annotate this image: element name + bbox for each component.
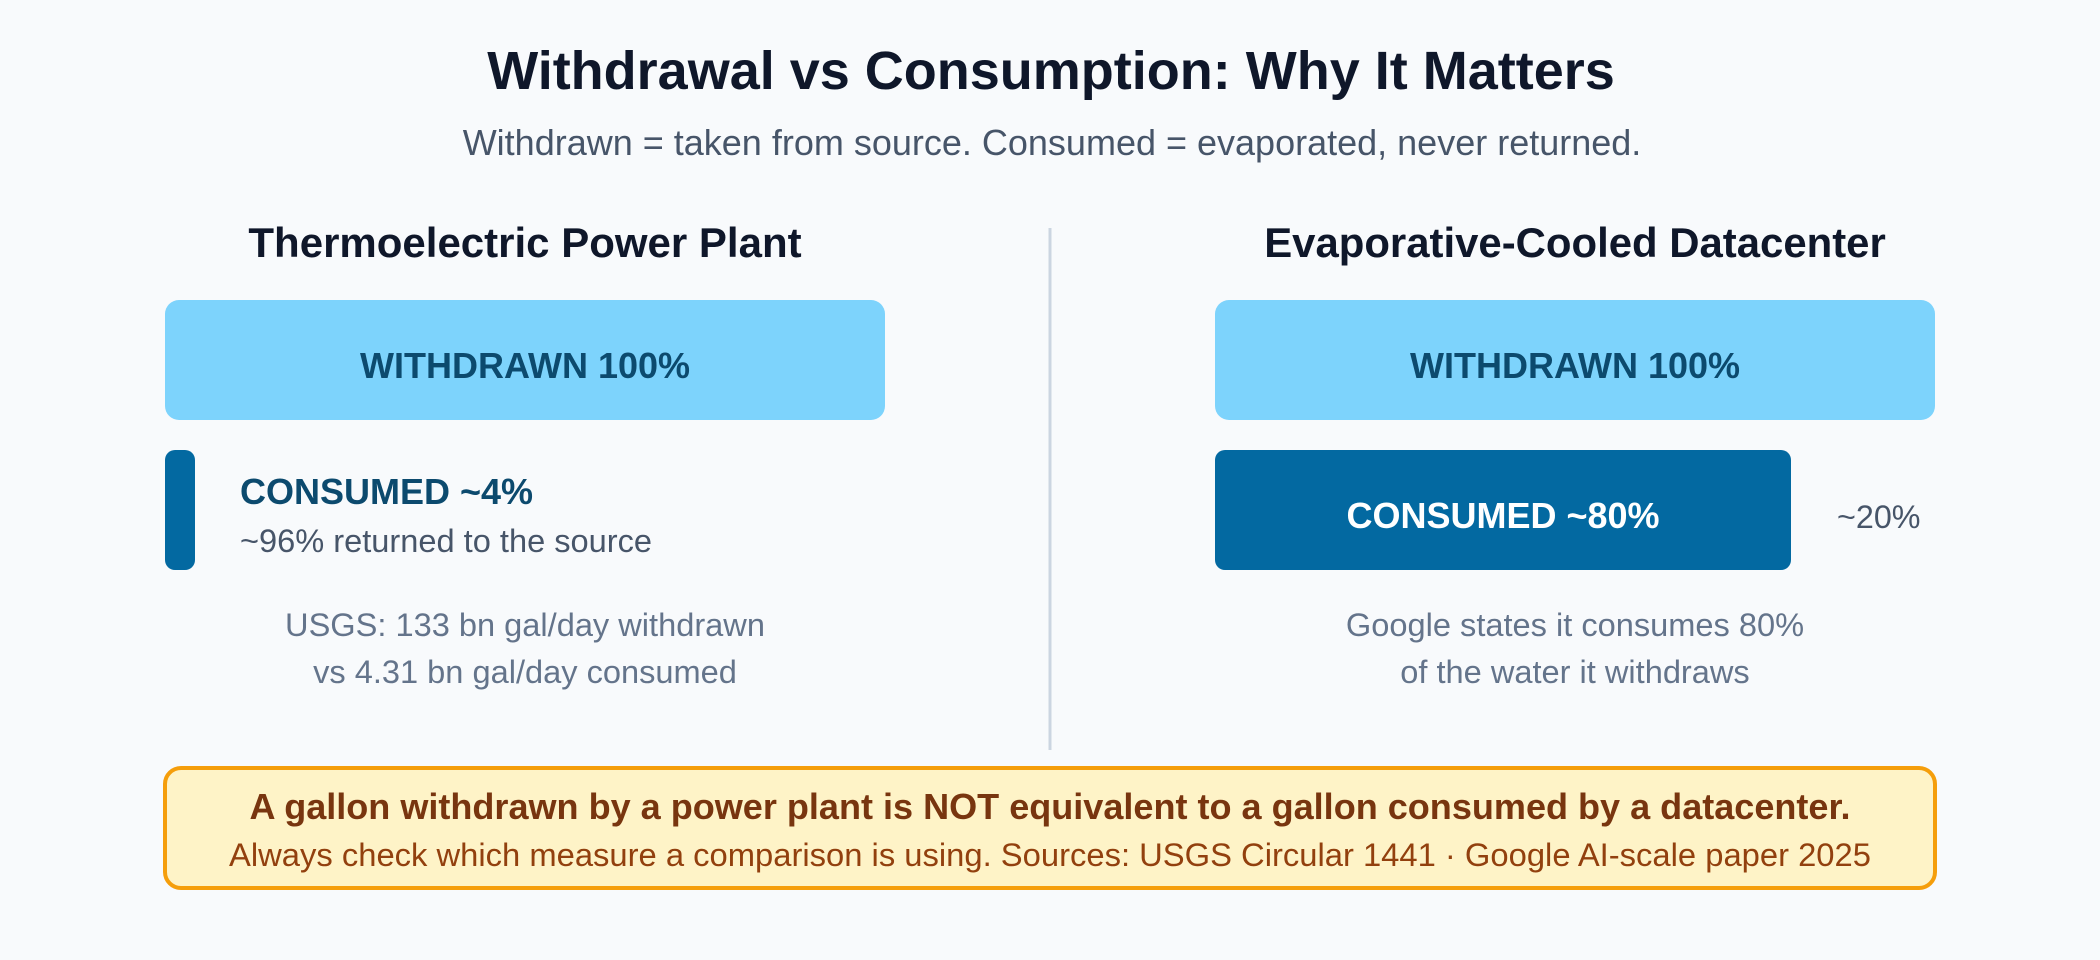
bar: consumed 80%: CONSUMED ~80% (1346, 495, 1660, 536)
note: USGS figures (285, 606, 765, 690)
subtitle: Withdrawn = taken from source. Consumed = evaporated, never returned. (463, 122, 1641, 163)
callout sources: Always check which measure a comparison is using. Sources: USGS Circular 1441 · Google AI-scale paper 2025 (229, 836, 1871, 873)
title: Withdrawal vs Consumption: Why It Matters (487, 41, 1615, 101)
note: USGS figures: vs 4.31 bn gal/day consumed (313, 653, 737, 690)
bar: withdrawn 100% (1215, 300, 1935, 420)
bar: consumed 80% (1215, 450, 1791, 570)
bar: consumed 4% (165, 450, 195, 570)
heading: evaporative-cooled datacenter: Evaporative-Cooled Datacenter (1264, 219, 1886, 266)
note: USGS figures: USGS: 133 bn gal/day withdrawn (285, 606, 765, 643)
label: remaining 20%: ~20% (1837, 499, 1921, 535)
bar: withdrawn 100%: WITHDRAWN 100% (360, 345, 690, 386)
divider (1048, 228, 1052, 750)
callout (165, 768, 1935, 888)
note: Google statement: of the water it withdraws (1400, 653, 1750, 690)
label: returned share: ~96% returned to the source (240, 522, 652, 559)
heading: thermoelectric power plant: Thermoelectric Power Plant (248, 219, 802, 266)
callout headline: A gallon withdrawn by a power plant is NOT equivalent to a gallon consumed by a datacenter. (249, 786, 1851, 827)
bar: withdrawn 100% (165, 300, 885, 420)
panel: thermoelectric power plant (165, 219, 885, 690)
panel: evaporative-cooled datacenter (1215, 219, 1935, 690)
note: Google statement (1346, 606, 1804, 690)
note: Google statement: Google states it consumes 80% (1346, 606, 1804, 643)
label: consumed 4%: CONSUMED ~4% (240, 471, 533, 512)
bar: withdrawn 100%: WITHDRAWN 100% (1410, 345, 1740, 386)
